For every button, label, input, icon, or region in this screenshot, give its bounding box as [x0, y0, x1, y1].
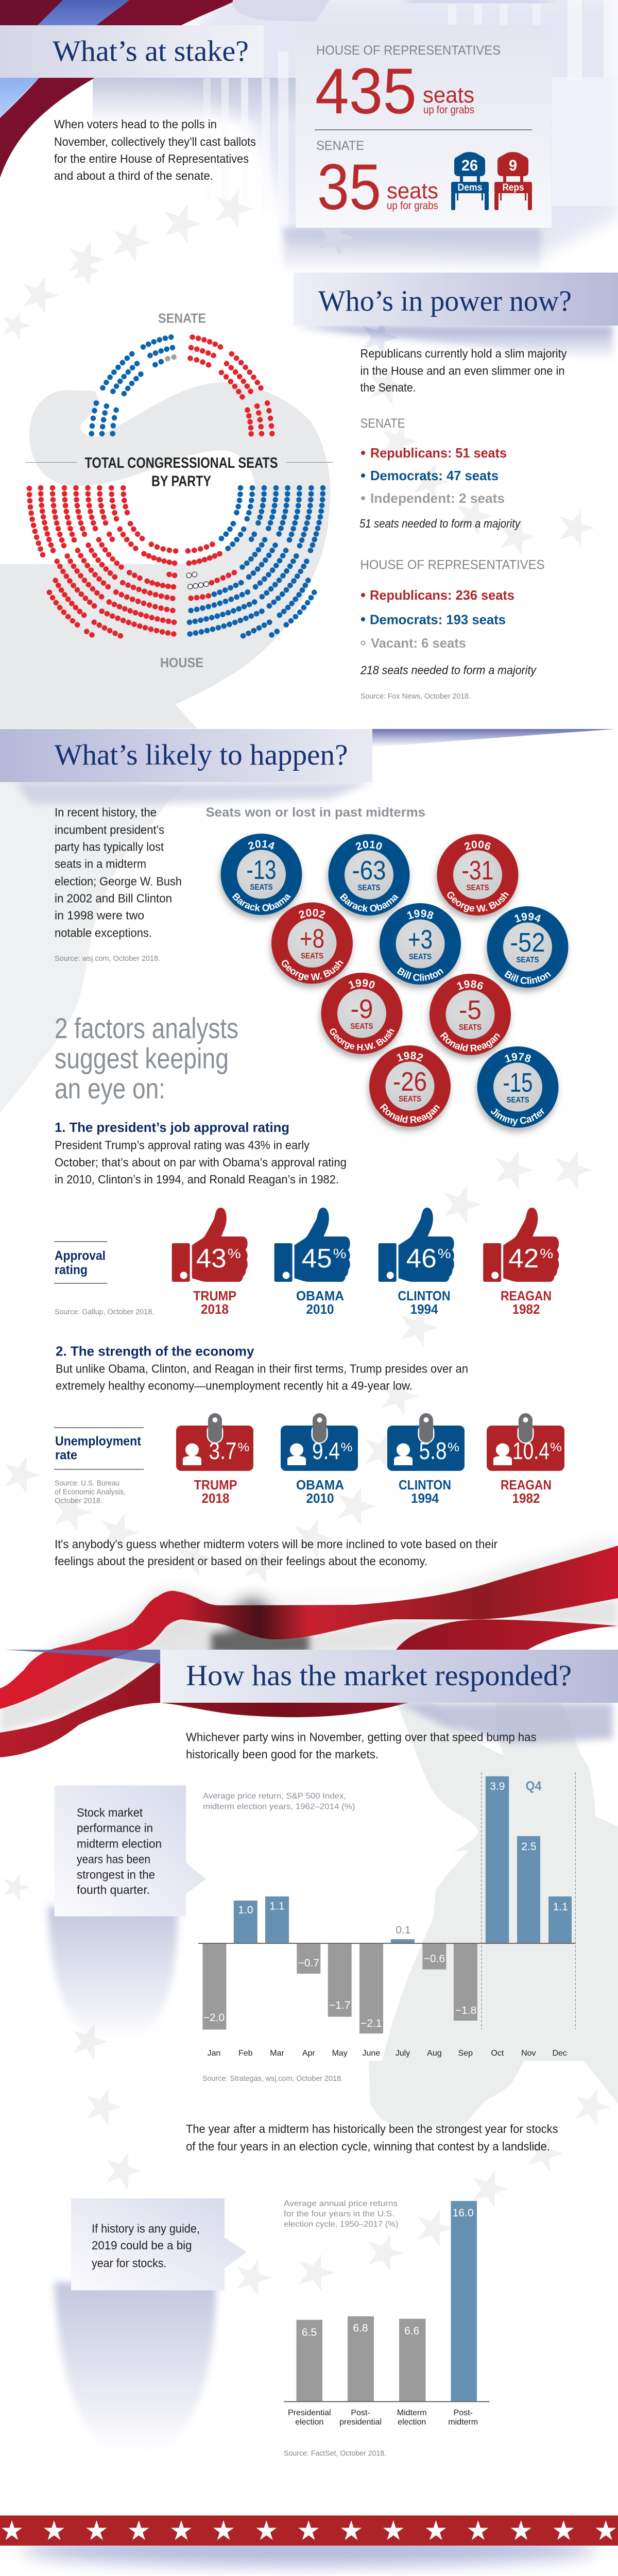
- icon: blue chair 26 Dems: 26: [461, 157, 478, 174]
- senate seats figure: up for grabs: [387, 200, 438, 212]
- text: whichever party: [186, 1730, 537, 1761]
- bar values: −2.1: [360, 2018, 382, 2029]
- chart: monthly S&amp;P returns: Average price return, S&P 500 Index,: [203, 1792, 346, 1801]
- heading shadow: market: [5, 1650, 613, 1744]
- background: gray silhouette: [369, 1703, 618, 2128]
- badge 1982: SEATS: [399, 1095, 421, 1104]
- chart: house seats hemicycle: [29, 488, 323, 670]
- icon: thumb Trump 43%: 43: [196, 1244, 227, 1274]
- labels: approval presidents: 1982: [512, 1301, 540, 1317]
- label: approval rating: Approval: [55, 1249, 106, 1263]
- house: democrats: [190, 488, 323, 636]
- title: total congressional seats: [26, 455, 333, 489]
- panel shadow: [283, 228, 541, 274]
- label: unemployment rate: Source: U.S. Bureau: [55, 1480, 119, 1488]
- house seats figure: seats: [423, 82, 474, 108]
- icon: thumb Reagan 42%: [483, 1208, 559, 1282]
- chart: election cycle returns: 16.0: [453, 2207, 474, 2219]
- badge 2006: [433, 834, 521, 923]
- text: whichever party: Whichever party wins in November, getting over that speed bump has: [186, 1730, 537, 1743]
- bars: [297, 2201, 477, 2401]
- senate seats figure: 35: [317, 151, 381, 223]
- senate seats figure: [316, 139, 438, 223]
- label: approval rating: [54, 1241, 154, 1316]
- labels: unemployment presidents: 1982: [512, 1490, 540, 1506]
- chart: election cycle returns: election cycle, 1950–2017 (%): [284, 2220, 399, 2229]
- text: who's in power paragraph: in the House and an even slimmer one in: [360, 364, 564, 377]
- heading: 2 factors: an eye on:: [55, 1072, 165, 1105]
- icon: thumb Clinton 46%: [379, 1208, 454, 1282]
- heading: 2 factors: suggest keeping: [55, 1042, 229, 1075]
- section: job approval: October; that’s about on par with Obama’s approval rating: [55, 1156, 347, 1169]
- labels: approval presidents: OBAMA: [296, 1288, 344, 1303]
- axis labels: Presidential: [288, 2409, 331, 2417]
- callout: fourth quarter: [55, 1786, 206, 1917]
- badge 1986: -5: [459, 995, 482, 1025]
- text: recent history: in 1998 were two: [55, 909, 144, 922]
- label: approval rating: rating: [55, 1263, 88, 1277]
- callout: fourth quarter: Stock market: [77, 1806, 143, 1819]
- badge 2010: SEATS: [357, 884, 381, 892]
- background: gray swirl lower: [0, 773, 185, 1113]
- badge 2014: Barack Obama: [232, 892, 291, 912]
- section: job approval: President Trump’s approval rating was 43% in early: [55, 1139, 310, 1152]
- labels: unemployment presidents: 2010: [306, 1490, 334, 1506]
- badge 1998: SEATS: [409, 953, 432, 961]
- flag stripes: [0, 0, 237, 178]
- chart: monthly S&amp;P returns: Source: Strategas, wsj.com, October 2018.: [202, 2075, 343, 2083]
- badge 1994: SEATS: [516, 956, 539, 964]
- text: anybody's guess: feelings about the president or based on their feelings about the economy.: [55, 1554, 427, 1568]
- bar values: −0.6: [424, 1953, 445, 1965]
- badge 1982: [365, 1045, 453, 1134]
- icon: red chair 9 Reps: [494, 152, 532, 210]
- badge 2006: SEATS: [467, 884, 489, 892]
- text: who's in power paragraph: [360, 347, 567, 394]
- callout: fourth quarter: fourth quarter.: [77, 1883, 150, 1896]
- badge 1986: 1986: [457, 980, 483, 990]
- badge 2014: 2014: [248, 840, 274, 850]
- labels: approval presidents: 2018: [201, 1301, 229, 1317]
- text: year after a midterm: [186, 2122, 558, 2153]
- icon: thumb Reagan 42%: %: [540, 1246, 553, 1261]
- text: anybody's guess: [55, 1537, 497, 1568]
- badge 2014: SEATS: [250, 883, 273, 892]
- bar values: −0.7: [298, 1957, 319, 1969]
- callout shadow: [54, 2282, 216, 2455]
- list: senate composition: Republicans: 51 seats: [370, 445, 507, 461]
- callout: history guide: year for stocks.: [92, 2257, 167, 2270]
- badge 1990: SEATS: [350, 1022, 373, 1031]
- labels: unemployment presidents: TRUMP: [194, 1477, 237, 1493]
- text: recent history: party has typically lost: [55, 840, 164, 853]
- label: approval rating: Source: Gallup, October 2018.: [55, 1308, 154, 1316]
- heading: Who's in power now: Who’s in power now?: [318, 285, 572, 317]
- bar values: 1.1: [269, 1900, 285, 1912]
- badge 1986: [425, 974, 513, 1063]
- badge 1998: Bill Clinton: [397, 968, 444, 981]
- chart: senate seats hemicycle: [92, 310, 272, 434]
- badge 2002: George W. Bush: [282, 960, 344, 980]
- section: economy: 2. The strength of the economy: [56, 1344, 254, 1359]
- badge 1994: Bill Clinton: [504, 971, 551, 984]
- senate: independents: [167, 357, 174, 359]
- labels: unemployment presidents: [194, 1477, 552, 1506]
- labels: approval presidents: CLINTON: [398, 1288, 450, 1303]
- list: senate composition: SENATE: [360, 416, 405, 431]
- bar values: 1.1: [553, 1901, 568, 1913]
- chart: monthly S&amp;P returns: Q4: [525, 1779, 542, 1793]
- bar values: 0.1: [396, 1924, 411, 1936]
- card: Reagan unemployment: %: [550, 1440, 562, 1454]
- axis labels: [288, 2409, 478, 2427]
- badge 2014: [216, 834, 305, 923]
- axis labels: election: [398, 2418, 426, 2427]
- bars: [202, 1944, 477, 2033]
- labels: approval presidents: TRUMP: [193, 1288, 236, 1303]
- flag ribbon: [0, 1538, 618, 1757]
- section: job approval: in 2010, Clinton’s in 1994, and Ronald Reagan’s in 1982.: [55, 1173, 339, 1186]
- chart: election cycle returns: [284, 2199, 489, 2458]
- axis labels: election: [295, 2418, 323, 2427]
- list: house composition: Vacant: 6 seats: [371, 635, 466, 651]
- house: vacant: [189, 574, 206, 587]
- heading shadow: who's in power: [294, 326, 613, 361]
- card: Clinton unemployment: 5.8: [419, 1437, 447, 1464]
- heading: What's at stake: [0, 25, 264, 78]
- badge 1982: 1982: [397, 1052, 423, 1062]
- heading: Who's in power now: [294, 273, 618, 326]
- labels: approval presidents: REAGAN: [501, 1288, 552, 1303]
- callout: fourth quarter: performance in: [77, 1821, 153, 1835]
- text: recent history: election; George W. Bush: [55, 875, 182, 888]
- icon: thumb Obama 45%: %: [333, 1246, 347, 1261]
- labels: approval presidents: 1994: [410, 1301, 438, 1317]
- label: unemployment rate: rate: [55, 1448, 77, 1462]
- labels: approval presidents: 2010: [306, 1301, 334, 1317]
- badge 1978: Jimmy Carter: [491, 1108, 544, 1126]
- labels: unemployment presidents: REAGAN: [501, 1477, 552, 1493]
- heading: How has the market responded: [160, 1650, 618, 1703]
- senate: democrats: [92, 337, 173, 434]
- badge 1998: +3: [408, 925, 433, 955]
- month labels: [208, 2049, 567, 2058]
- chart: monthly S&amp;P returns: midterm election years, 1962–2014 (%): [203, 1802, 355, 1811]
- chart: election cycle returns: for the four years in the U.S.: [284, 2210, 394, 2218]
- list: senate composition: Democrats: 47 seats: [370, 468, 499, 483]
- card: Clinton unemployment: %: [448, 1440, 459, 1454]
- badge 2002: +8: [300, 924, 324, 954]
- list: house composition: Republicans: 236 seats: [370, 587, 514, 603]
- list: house composition: Source: Fox News, October 2018.: [360, 692, 471, 701]
- heading: How has the market responded: How has the market responded?: [186, 1659, 572, 1692]
- axis labels: Midterm: [397, 2409, 427, 2417]
- icon: thumb Reagan 42%: 42: [508, 1244, 539, 1274]
- labels: unemployment presidents: OBAMA: [296, 1477, 344, 1493]
- labels: unemployment presidents: CLINTON: [399, 1477, 451, 1493]
- card: Obama unemployment: 9.4: [312, 1437, 340, 1464]
- badge 1978: [473, 1046, 561, 1136]
- label: unemployment rate: Unemployment: [55, 1434, 142, 1449]
- label: unemployment rate: [54, 1427, 144, 1505]
- bar values: 2.5: [521, 1841, 537, 1853]
- callout shadow: [47, 1906, 178, 2043]
- axis labels: midterm: [448, 2418, 478, 2427]
- list: house composition: [360, 557, 545, 701]
- month labels: Mar: [270, 2049, 284, 2058]
- background: gray swirl: [0, 382, 331, 728]
- badge 1978: 1978: [505, 1053, 531, 1062]
- card: Clinton unemployment: [387, 1413, 465, 1471]
- list: senate composition: Independent: 2 seats: [370, 490, 505, 506]
- bar values: 1.0: [238, 1904, 253, 1916]
- badge 2010: Barack Obama: [340, 893, 399, 912]
- heading: What's at stake: What’s at stake?: [53, 35, 249, 67]
- icon: blue chair 26 Dems: [451, 152, 489, 210]
- chart: senate seats hemicycle: SENATE: [158, 310, 206, 326]
- callout: fourth quarter: strongest in the: [77, 1868, 155, 1882]
- text: intro paragraph: for the entire House of Representatives: [54, 152, 249, 165]
- list: house composition: 218 seats needed to form a majority: [360, 664, 537, 677]
- axis labels: Post-: [351, 2409, 370, 2417]
- card: Reagan unemployment: [487, 1413, 564, 1471]
- badge 2002: SEATS: [301, 952, 323, 960]
- bar values: −1.8: [455, 2005, 476, 2016]
- card: Reagan unemployment: 10.4: [512, 1437, 550, 1464]
- month labels: Feb: [238, 2049, 253, 2058]
- section: economy: But unlike Obama, Clinton, and Reagan in their first terms, Trump presides over an: [56, 1362, 468, 1376]
- footer band with stars: [0, 2515, 618, 2546]
- title: total congressional seats: BY PARTY: [151, 473, 211, 489]
- badge 2014: -13: [246, 855, 276, 885]
- month labels: Nov: [521, 2049, 536, 2058]
- icon: red chair 9 Reps: 9: [509, 157, 517, 174]
- badge 1978: -15: [503, 1068, 533, 1098]
- panel: seats up for grabs: [296, 25, 552, 228]
- axis labels: Post-: [454, 2409, 473, 2417]
- text: recent history: in 2002 and Bill Clinton: [55, 891, 172, 905]
- heading shadow: what's likely: [15, 729, 615, 804]
- house seats figure: 435: [315, 56, 417, 127]
- text: year after a midterm: of the four years in an election cycle, winning that contest by a landslide.: [186, 2140, 550, 2153]
- badge 1994: 1994: [514, 913, 541, 922]
- callout: history guide: 2019 could be a big: [92, 2239, 192, 2252]
- badge 2006: -31: [461, 856, 493, 886]
- callout: history guide: [71, 2198, 247, 2291]
- badge 1990: [316, 973, 405, 1062]
- text: who's in power paragraph: the Senate.: [360, 381, 416, 394]
- section: job approval: [55, 1120, 347, 1186]
- senate seats figure: SENATE: [316, 139, 364, 153]
- chart: election cycle returns: Average annual price returns: [284, 2199, 398, 2208]
- chart: house seats hemicycle: HOUSE: [160, 655, 203, 670]
- section: economy: extremely healthy economy—unemployment recently hit a 49-year low.: [56, 1379, 413, 1392]
- text: who's in power paragraph: Republicans currently hold a slim majority: [360, 347, 567, 360]
- senate seats figure: seats: [387, 178, 438, 204]
- bar values: 3.9: [490, 1781, 505, 1792]
- section: economy: [56, 1344, 468, 1392]
- dome: [233, 0, 330, 22]
- title: total congressional seats: TOTAL CONGRESSIONAL SEATS: [84, 455, 278, 471]
- chart: election cycle returns: 6.5: [302, 2327, 317, 2338]
- text: intro paragraph: When voters head to the polls in: [54, 117, 217, 131]
- labels: approval presidents: [193, 1288, 552, 1317]
- chart: election cycle returns: Source: FactSet, October 2018.: [284, 2449, 386, 2458]
- house seats figure: [315, 43, 501, 127]
- text: anybody's guess: It's anybody's guess whether midterm voters will be more inclined to vote based on their: [55, 1537, 497, 1551]
- icon: red chair 9 Reps: Reps: [503, 182, 524, 193]
- icon: thumb Trump 43%: %: [228, 1246, 241, 1261]
- card: Obama unemployment: [281, 1413, 358, 1471]
- chart: election cycle returns: 6.8: [353, 2323, 368, 2334]
- icon: thumb Clinton 46%: %: [438, 1246, 451, 1261]
- month labels: May: [332, 2049, 348, 2058]
- house: republicans: [29, 488, 234, 636]
- card: Trump unemployment: %: [238, 1440, 249, 1454]
- columns: [203, 0, 618, 227]
- badge 2002: 2002: [299, 909, 325, 919]
- heading: What's likely to happen: [0, 729, 372, 782]
- background: capitol photo and flag: [0, 0, 618, 258]
- month labels: June: [363, 2049, 380, 2058]
- badge 1986: Ronald Reagan: [440, 1031, 501, 1052]
- badge 1982: Ronald Reagan: [380, 1104, 440, 1123]
- text: recent history: In recent history, the: [55, 806, 157, 819]
- callout: fourth quarter: years has been: [77, 1853, 150, 1866]
- badge 1994: [482, 906, 571, 995]
- month labels: Oct: [491, 2049, 504, 2058]
- badge 2010: -63: [352, 856, 386, 886]
- text: whichever party: historically been good for the markets.: [186, 1748, 379, 1761]
- text: recent history: notable exceptions.: [55, 926, 152, 940]
- text: intro paragraph: and about a third of the senate.: [54, 169, 213, 182]
- labels: unemployment presidents: 1994: [411, 1490, 439, 1506]
- footer shadow: [21, 2535, 597, 2566]
- callout: fourth quarter: midterm election: [77, 1837, 162, 1851]
- heading: What's likely to happen: What’s likely to happen?: [55, 739, 348, 771]
- heading: 2 factors: [55, 1012, 238, 1105]
- month labels: July: [396, 2049, 410, 2058]
- card: Trump unemployment: [176, 1413, 253, 1471]
- heading: 2 factors: 2 factors analysts: [55, 1012, 238, 1044]
- badge 2002: [267, 903, 355, 991]
- badge 1982: -26: [393, 1067, 427, 1097]
- text: year after a midterm: The year after a midterm has historically been the strongest year for stocks: [186, 2122, 558, 2136]
- badge 2010: [323, 834, 412, 923]
- badge 1978: SEATS: [507, 1096, 529, 1105]
- card: Trump unemployment: 3.7: [209, 1437, 237, 1464]
- labels: unemployment presidents: 2018: [202, 1490, 230, 1506]
- text: recent history: seats in a midterm: [55, 857, 146, 871]
- badge 2006: George W. Bush: [447, 891, 509, 912]
- text: recent history: incumbent president’s: [55, 823, 164, 837]
- badge 1990: -9: [350, 994, 373, 1024]
- icon: thumb Clinton 46%: 46: [406, 1244, 437, 1274]
- card: Obama unemployment: %: [341, 1440, 352, 1454]
- heading: seats won or lost: Seats won or lost in past midterms: [206, 805, 425, 820]
- callout: history guide: If history is any guide,: [92, 2222, 200, 2235]
- month labels: Apr: [302, 2049, 315, 2058]
- icon: thumb Trump 43%: [172, 1208, 248, 1282]
- bar values: −2.0: [203, 2012, 225, 2024]
- list: house composition: Democrats: 193 seats: [370, 612, 506, 628]
- badge 1994: -52: [510, 928, 545, 958]
- house seats figure: HOUSE OF REPRESENTATIVES: [316, 43, 501, 58]
- house seats figure: up for grabs: [423, 104, 474, 116]
- text: recent history: [55, 806, 182, 963]
- bar values: −1.7: [329, 1999, 350, 2011]
- senate: republicans: [190, 337, 272, 434]
- label: unemployment rate: of Economic Analysis,: [55, 1488, 126, 1496]
- list: house composition: HOUSE OF REPRESENTATIVES: [360, 557, 545, 572]
- month labels: Dec: [552, 2049, 567, 2058]
- axis labels: presidential: [339, 2418, 382, 2427]
- text: intro paragraph: [54, 117, 256, 182]
- badge 1998: 1998: [407, 910, 434, 919]
- bar values: [203, 1781, 568, 2029]
- text: intro paragraph: November, collectively they’ll cast ballots: [54, 135, 256, 148]
- chart: monthly S&amp;P returns: [198, 1772, 575, 2083]
- badge 1990: George H.W. Bush: [330, 1028, 394, 1051]
- section: job approval: 1. The president’s job approval rating: [55, 1120, 289, 1135]
- list: senate composition: [359, 416, 521, 530]
- icon: blue chair 26 Dems: Dems: [457, 182, 482, 193]
- icon: thumb Obama 45%: 45: [302, 1244, 332, 1274]
- badge 1986: SEATS: [459, 1023, 482, 1032]
- chart: midterm badges: [216, 834, 571, 1136]
- chart: election cycle returns: 6.6: [404, 2325, 419, 2337]
- label: unemployment rate: October 2018.: [55, 1497, 102, 1505]
- badge 1990: 1990: [349, 979, 375, 989]
- badge 2006: 2006: [465, 841, 491, 851]
- month labels: Jan: [208, 2049, 220, 2058]
- month labels: Sep: [458, 2049, 473, 2058]
- badge 1998: [375, 903, 464, 992]
- text: recent history: Source: wsj.com, October 2018.: [55, 955, 160, 963]
- month labels: Aug: [427, 2049, 442, 2058]
- badge 2010: 2010: [355, 841, 382, 851]
- list: senate composition: 51 seats needed to form a majority: [359, 517, 521, 530]
- icon: thumb Obama 45%: [274, 1208, 350, 1282]
